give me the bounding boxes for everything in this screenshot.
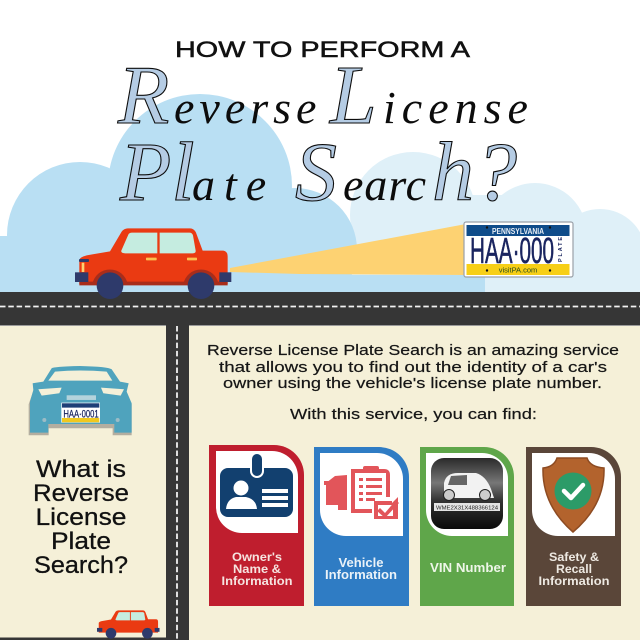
- intro paragraph: owner using the vehicle's license plate number.: [223, 375, 602, 392]
- icon: car and checklist: [324, 466, 399, 519]
- license plate: [464, 222, 573, 277]
- intro paragraph: that allows you to find out the identity of a car's: [219, 359, 607, 376]
- heading: what is reverse license plate search: Plate: [51, 528, 111, 555]
- card: owner's name and information: Information: [222, 574, 292, 588]
- icon: shield with check: [543, 458, 604, 532]
- card: vehicle information: Information: [325, 568, 397, 582]
- main road: [0, 292, 640, 326]
- card: safety and recall information: Information: [538, 574, 610, 588]
- cream panel background: [0, 326, 640, 640]
- card: owner's name and information: Name &: [233, 562, 281, 576]
- small red car: [97, 610, 160, 639]
- red car: [75, 228, 231, 299]
- title: script line one: everse: [174, 82, 338, 133]
- intro paragraph: [207, 342, 619, 423]
- card: vin number: VIN Number: [430, 561, 506, 575]
- title: script line two: S: [295, 126, 337, 219]
- card: vehicle information: Vehicle: [338, 556, 384, 570]
- card: owner's name and information: Owner's: [232, 550, 282, 564]
- card: safety and recall information: Recall: [556, 562, 592, 576]
- teal car front view: HAA·0001: [63, 408, 99, 420]
- heading: what is reverse license plate search: Search?: [34, 552, 128, 579]
- card: safety and recall information: [526, 447, 621, 606]
- title: script line two: h: [432, 126, 474, 219]
- title: script line two: ate: [192, 159, 296, 210]
- bottom road edge: [0, 638, 166, 640]
- icon: id badge: [220, 453, 293, 517]
- title: script line two: earc: [343, 159, 427, 210]
- heading: what is reverse license plate search: Reverse: [33, 480, 129, 507]
- vertical road: [166, 325, 189, 640]
- title: script line one: L: [329, 49, 377, 142]
- headlight beam: [230, 224, 466, 275]
- title: script line one: R: [117, 49, 169, 142]
- card: owner's name and information: [209, 445, 304, 606]
- card: safety and recall information: Safety &: [549, 550, 599, 564]
- title: script line two: Pl: [119, 126, 195, 219]
- title: script line one: icense: [383, 82, 534, 133]
- intro paragraph: With this service, you can find:: [290, 406, 537, 423]
- license plate: PENNSYLVANIA: [492, 227, 544, 236]
- card: vin number: [420, 447, 514, 606]
- icon: vin car tile: WME2X31X488366124: [436, 506, 498, 512]
- license plate: visitPA.com: [499, 266, 537, 274]
- title: how to perform a: HOW TO PERFORM A: [175, 37, 470, 62]
- background clouds: [0, 0, 640, 312]
- heading: what is reverse license plate search: [33, 456, 129, 579]
- license plate: PLATE: [558, 237, 564, 262]
- intro paragraph: Reverse License Plate Search is an amazing service: [207, 342, 619, 359]
- icon: vin car tile: [431, 458, 503, 529]
- heading: what is reverse license plate search: License: [36, 504, 126, 531]
- card: vehicle information: [314, 447, 409, 606]
- license plate: HAA·000: [470, 230, 554, 271]
- heading: what is reverse license plate search: What is: [36, 456, 126, 483]
- teal car front view: [29, 366, 132, 435]
- title: script line two: ?: [475, 126, 517, 219]
